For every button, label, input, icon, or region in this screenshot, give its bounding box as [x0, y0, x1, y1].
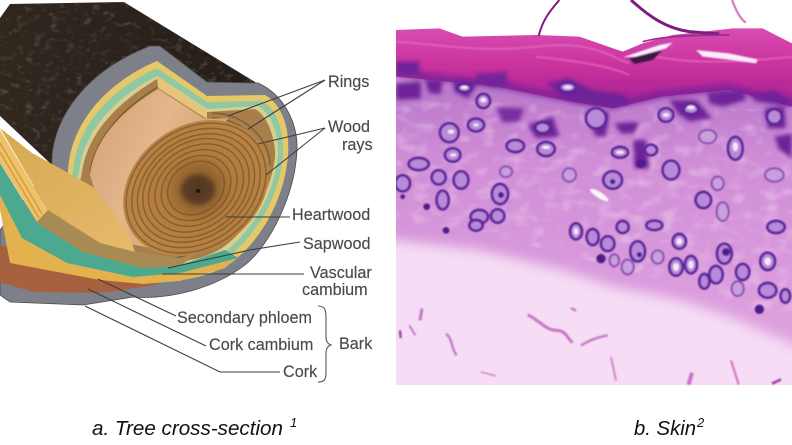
heartwood face — [96, 92, 296, 284]
pale cracks — [623, 43, 758, 64]
phloem layer — [60, 61, 288, 282]
epidermis cell borders — [396, 100, 792, 327]
epidermis — [383, 77, 792, 350]
label: Vascular cambium: cambium — [302, 281, 368, 299]
label: Heartwood: Heartwood — [292, 206, 370, 224]
caption: tree: a. Tree cross-section — [92, 418, 283, 440]
label: Bark: Bark — [339, 335, 373, 353]
label: Rings: Rings — [328, 73, 369, 91]
dermis — [396, 236, 792, 385]
pale streaks in corneum — [396, 42, 792, 75]
dermis fibres — [400, 308, 781, 385]
diagram: tree cross-section — [0, 2, 373, 382]
nuclei lower — [443, 220, 790, 314]
label: Wood rays: rays — [342, 136, 373, 154]
sapwood rings — [90, 87, 270, 259]
stratum corneum — [396, 28, 792, 108]
flap stripe lines — [0, 143, 42, 218]
label: Cork: Cork — [283, 363, 318, 381]
bark exterior — [0, 2, 285, 200]
nuclei upper — [395, 83, 784, 223]
unrolled flap: vascular cambium — [0, 163, 238, 277]
unrolled flap: secondary phloem — [0, 190, 240, 284]
unrolled flap: wood surface — [0, 128, 143, 254]
unrolled flap: cork cambium — [0, 245, 160, 293]
label: Vascular cambium: Vascular — [310, 264, 372, 282]
wood notch edge — [157, 76, 207, 119]
label: Secondary phloem: Secondary phloem — [177, 309, 312, 327]
footnote 1: 1 — [290, 415, 297, 430]
label: Cork cambium: Cork cambium — [209, 336, 313, 354]
cork layer — [0, 46, 297, 305]
dark granular band — [396, 62, 792, 168]
photo: skin histology — [383, 0, 792, 385]
caption: skin: b. Skin — [634, 418, 696, 440]
inner wood cylinder — [90, 89, 228, 250]
sapwood — [70, 79, 275, 262]
white vesicle — [589, 188, 610, 202]
hairs of keratin — [539, 0, 746, 42]
label: Sapwood: Sapwood — [303, 235, 371, 253]
thin cream ring — [66, 76, 278, 266]
footnote 2: 2 — [696, 415, 705, 430]
leader lines — [85, 80, 325, 372]
photo: skin lower portion — [400, 220, 790, 385]
flap edge stripes — [0, 130, 48, 222]
brace: bark group — [318, 306, 331, 382]
label: Wood rays: Wood — [328, 118, 370, 136]
vascular cambium ring — [62, 68, 283, 273]
unrolled flap: sapwood band — [37, 210, 200, 268]
